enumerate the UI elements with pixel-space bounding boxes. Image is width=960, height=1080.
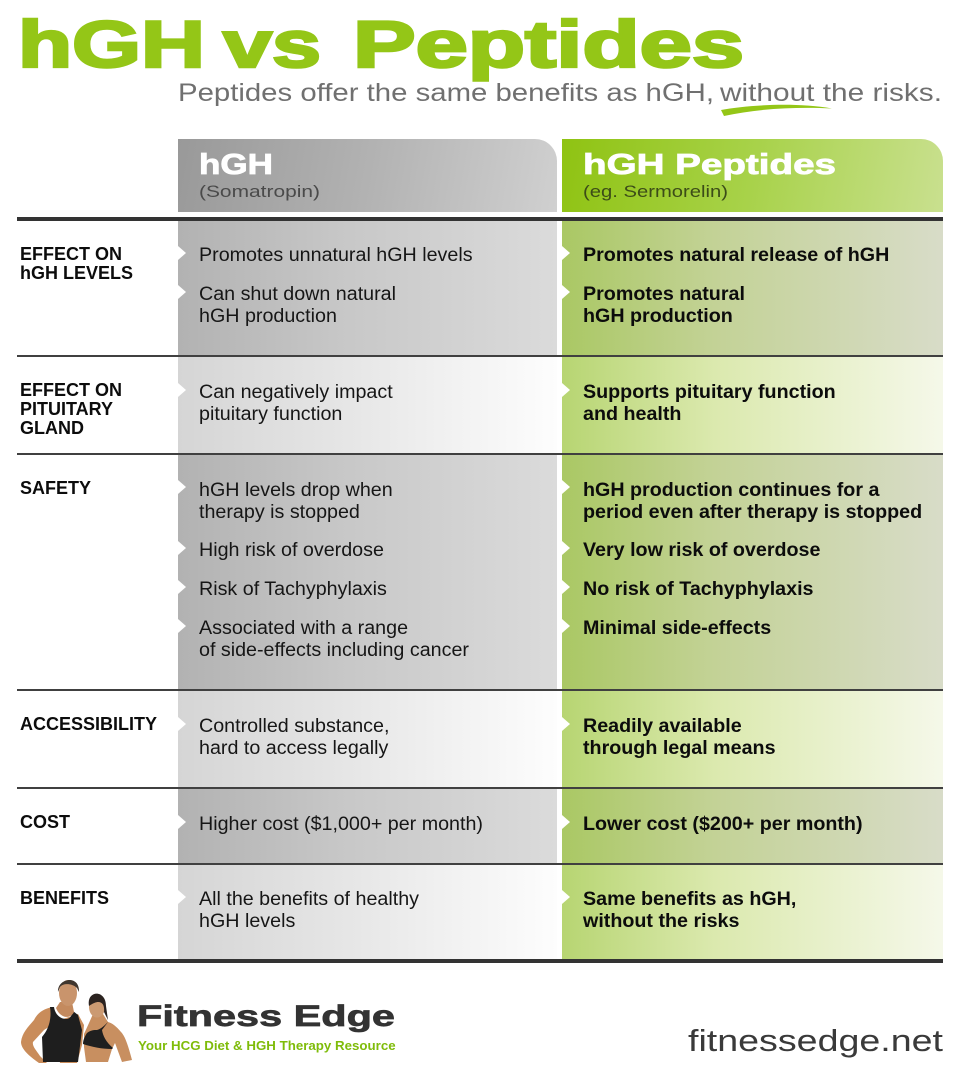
- row label: PITUITARY: [20, 399, 113, 419]
- peptides cell: [562, 357, 943, 453]
- hGH cell: [178, 865, 557, 959]
- row label: EFFECT ON: [20, 244, 122, 264]
- green underline swoosh: [721, 104, 832, 116]
- man: [21, 980, 84, 1063]
- subtitle: without the risks.: [719, 79, 942, 107]
- header title: hGH Peptides: hGH Peptides: [583, 149, 836, 181]
- peptides cell: period even after therapy is stopped: [583, 501, 922, 523]
- hGH cell: [178, 455, 557, 689]
- hGH cell: Higher cost ($1,000+ per month): [199, 813, 483, 835]
- peptides cell: Very low risk of overdose: [583, 539, 820, 561]
- hGH cell: hGH levels drop when: [199, 479, 393, 501]
- peptides cell: [562, 221, 943, 355]
- row label: [20, 380, 122, 438]
- header subtitle: Sermorelin: (eg. Sermorelin): [583, 182, 728, 201]
- hGH cell: [178, 357, 557, 453]
- hGH cell: hGH levels: [199, 910, 295, 932]
- row label: ACCESSIBILITY: [20, 714, 157, 734]
- peptides cell: Supports pituitary function: [583, 381, 836, 403]
- row: accessibility: [20, 691, 943, 787]
- woman: [83, 994, 132, 1062]
- row: effect on pituitary gland: [20, 357, 943, 453]
- peptides cell: and health: [583, 403, 681, 425]
- row label: SAFETY: [20, 478, 91, 498]
- title: [18, 7, 744, 82]
- hGH cell: [178, 789, 557, 863]
- row: safety: [20, 455, 943, 689]
- hGH cell: Can negatively impact: [199, 381, 393, 403]
- row label: COST: [20, 812, 70, 832]
- top rule: [17, 217, 943, 221]
- hGH cell: Promotes unnatural hGH levels: [199, 244, 473, 266]
- subtitle: [178, 79, 942, 107]
- hGH cell: [178, 691, 557, 787]
- header subtitle: Somatropin: (Somatropin): [199, 182, 320, 201]
- peptides cell: Promotes natural release of hGH: [583, 244, 889, 266]
- header: hGH: [178, 139, 557, 212]
- peptides cell: Lower cost ($200+ per month): [583, 813, 863, 835]
- row label: [20, 244, 133, 283]
- row: effect on hGH levels: [20, 221, 943, 355]
- row label: BENEFITS: [20, 888, 109, 908]
- hGH cell: All the benefits of healthy: [199, 888, 419, 910]
- hGH cell: therapy is stopped: [199, 501, 360, 523]
- peptides cell: Promotes natural: [583, 283, 745, 305]
- title: vs: [223, 7, 321, 81]
- hGH cell: High risk of overdose: [199, 539, 384, 561]
- peptides cell: Readily available: [583, 715, 742, 737]
- logo tagline: Your HCG Diet & HGH Therapy Resource: [138, 1038, 396, 1053]
- logo wordmark: Fitness Edge: [137, 1000, 395, 1033]
- row label: hGH LEVELS: [20, 263, 133, 283]
- row: benefits: [20, 865, 943, 959]
- peptides cell: [562, 865, 943, 959]
- peptides cell: [562, 455, 943, 689]
- hGH cell: pituitary function: [199, 403, 342, 425]
- title: Peptides: [353, 7, 744, 81]
- hGH cell: Associated with a range: [199, 617, 408, 639]
- hGH cell: Controlled substance,: [199, 715, 389, 737]
- row: cost: [20, 789, 943, 863]
- header title: hGH: hGH: [199, 149, 273, 181]
- title: hGH: [18, 7, 205, 81]
- peptides cell: hGH production: [583, 305, 733, 327]
- row label: GLAND: [20, 418, 84, 438]
- peptides cell: Minimal side-effects: [583, 617, 771, 639]
- peptides cell: without the risks: [583, 910, 739, 932]
- hGH cell: Risk of Tachyphylaxis: [199, 578, 387, 600]
- logo photo: two athletes: [21, 980, 132, 1063]
- website: fitnessedge.net: [688, 1023, 943, 1058]
- peptides cell: Same benefits as hGH,: [583, 888, 796, 910]
- hGH cell: hard to access legally: [199, 737, 388, 759]
- peptides cell: [562, 691, 943, 787]
- bottom rule: [17, 959, 943, 963]
- hGH cell: hGH production: [199, 305, 337, 327]
- hGH cell: of side-effects including cancer: [199, 639, 469, 661]
- hGH cell: [178, 221, 557, 355]
- peptides cell: No risk of Tachyphylaxis: [583, 578, 814, 600]
- hGH cell: Can shut down natural: [199, 283, 396, 305]
- row label: EFFECT ON: [20, 380, 122, 400]
- peptides cell: hGH production continues for a: [583, 479, 879, 501]
- subtitle: Peptides offer the same benefits as hGH,: [178, 79, 714, 107]
- header: hGH Peptides: [562, 139, 943, 212]
- peptides cell: [562, 789, 943, 863]
- peptides cell: through legal means: [583, 737, 776, 759]
